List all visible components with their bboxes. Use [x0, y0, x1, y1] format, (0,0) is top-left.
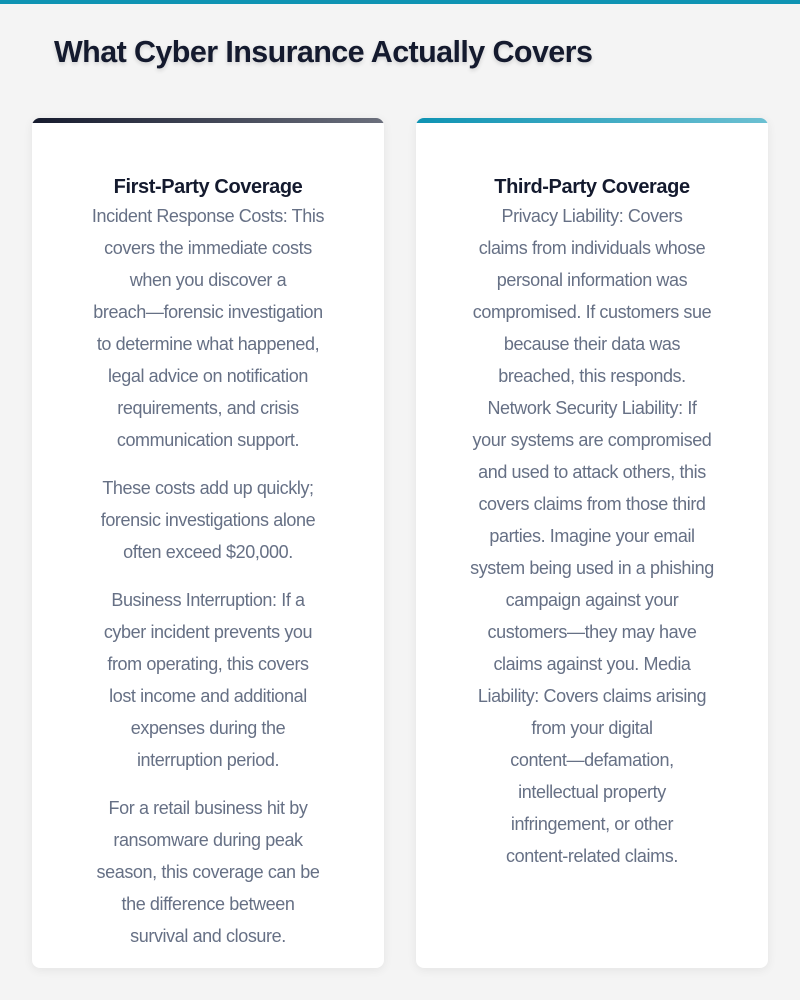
text: retail example: the difference between [121, 894, 294, 914]
text: liabilities: and used to attack others, this [478, 462, 706, 482]
text: incident response: to determine what happened, [97, 334, 319, 354]
text: incident response: when you discover a [130, 270, 286, 290]
text: liabilities: Liability: Covers claims arising [478, 686, 706, 706]
text: incident response: Incident Response Costs: This [92, 206, 324, 226]
text: incident response: requirements, and crisis [117, 398, 299, 418]
text: liabilities: from your digital [531, 718, 653, 738]
text: business interruption: expenses during the [131, 718, 285, 738]
text: incident response: communication support. [117, 430, 299, 450]
text: liabilities: campaign against your [506, 590, 678, 610]
heading: first-party: First-Party Coverage [114, 176, 302, 198]
text: liabilities: compromised. If customers sue [473, 302, 711, 322]
text: incident response: legal advice on notification [108, 366, 308, 386]
text: incident response [92, 206, 324, 450]
text: incident response: breach—forensic investigation [93, 302, 323, 322]
text: liabilities: parties. Imagine your email [489, 526, 695, 546]
panel: third-party coverage [416, 118, 768, 968]
text: costs: often exceed $20,000. [123, 542, 293, 562]
text: liabilities: breached, this responds. [498, 366, 686, 386]
text: liabilities: content—defamation, [510, 750, 674, 770]
text: liabilities: Privacy Liability: Covers [501, 206, 683, 226]
text: liabilities: intellectual property [518, 782, 666, 802]
text: liabilities: Network Security Liability: If [487, 398, 697, 418]
text: liabilities: system being used in a phishing [470, 558, 714, 578]
text: liabilities: because their data was [504, 334, 680, 354]
text: liabilities: claims against you. Media [493, 654, 691, 674]
text: incident response: covers the immediate costs [104, 238, 312, 258]
text: costs: These costs add up quickly; [102, 478, 314, 498]
text: liabilities: claims from individuals whose [479, 238, 705, 258]
text: liabilities [470, 206, 714, 866]
panel: first-party coverage [32, 118, 384, 968]
text: business interruption: lost income and additional [109, 686, 307, 706]
text: liabilities: infringement, or other [511, 814, 673, 834]
text: costs [101, 478, 315, 562]
text: costs: forensic investigations alone [101, 510, 315, 530]
text: liabilities: content-related claims. [506, 846, 678, 866]
title: What Cyber Insurance Actually Covers [54, 35, 592, 69]
text: business interruption: from operating, this covers [107, 654, 309, 674]
text: business interruption: cyber incident prevents you [104, 622, 312, 642]
heading: third-party: Third-Party Coverage [494, 176, 690, 198]
text: retail example: season, this coverage can be [97, 862, 319, 882]
text: business interruption: Business Interruption: If a [111, 590, 305, 610]
text: business interruption: interruption period. [137, 750, 279, 770]
text: business interruption [104, 590, 312, 770]
text: retail example: ransomware during peak [113, 830, 303, 850]
text: retail example [97, 798, 320, 946]
text: liabilities: personal information was [497, 270, 687, 290]
text: retail example: For a retail business hit by [109, 798, 307, 818]
text: liabilities: customers—they may have [488, 622, 696, 642]
text: retail example: survival and closure. [130, 926, 286, 946]
text: liabilities: covers claims from those third [478, 494, 706, 514]
text: liabilities: your systems are compromised [473, 430, 711, 450]
